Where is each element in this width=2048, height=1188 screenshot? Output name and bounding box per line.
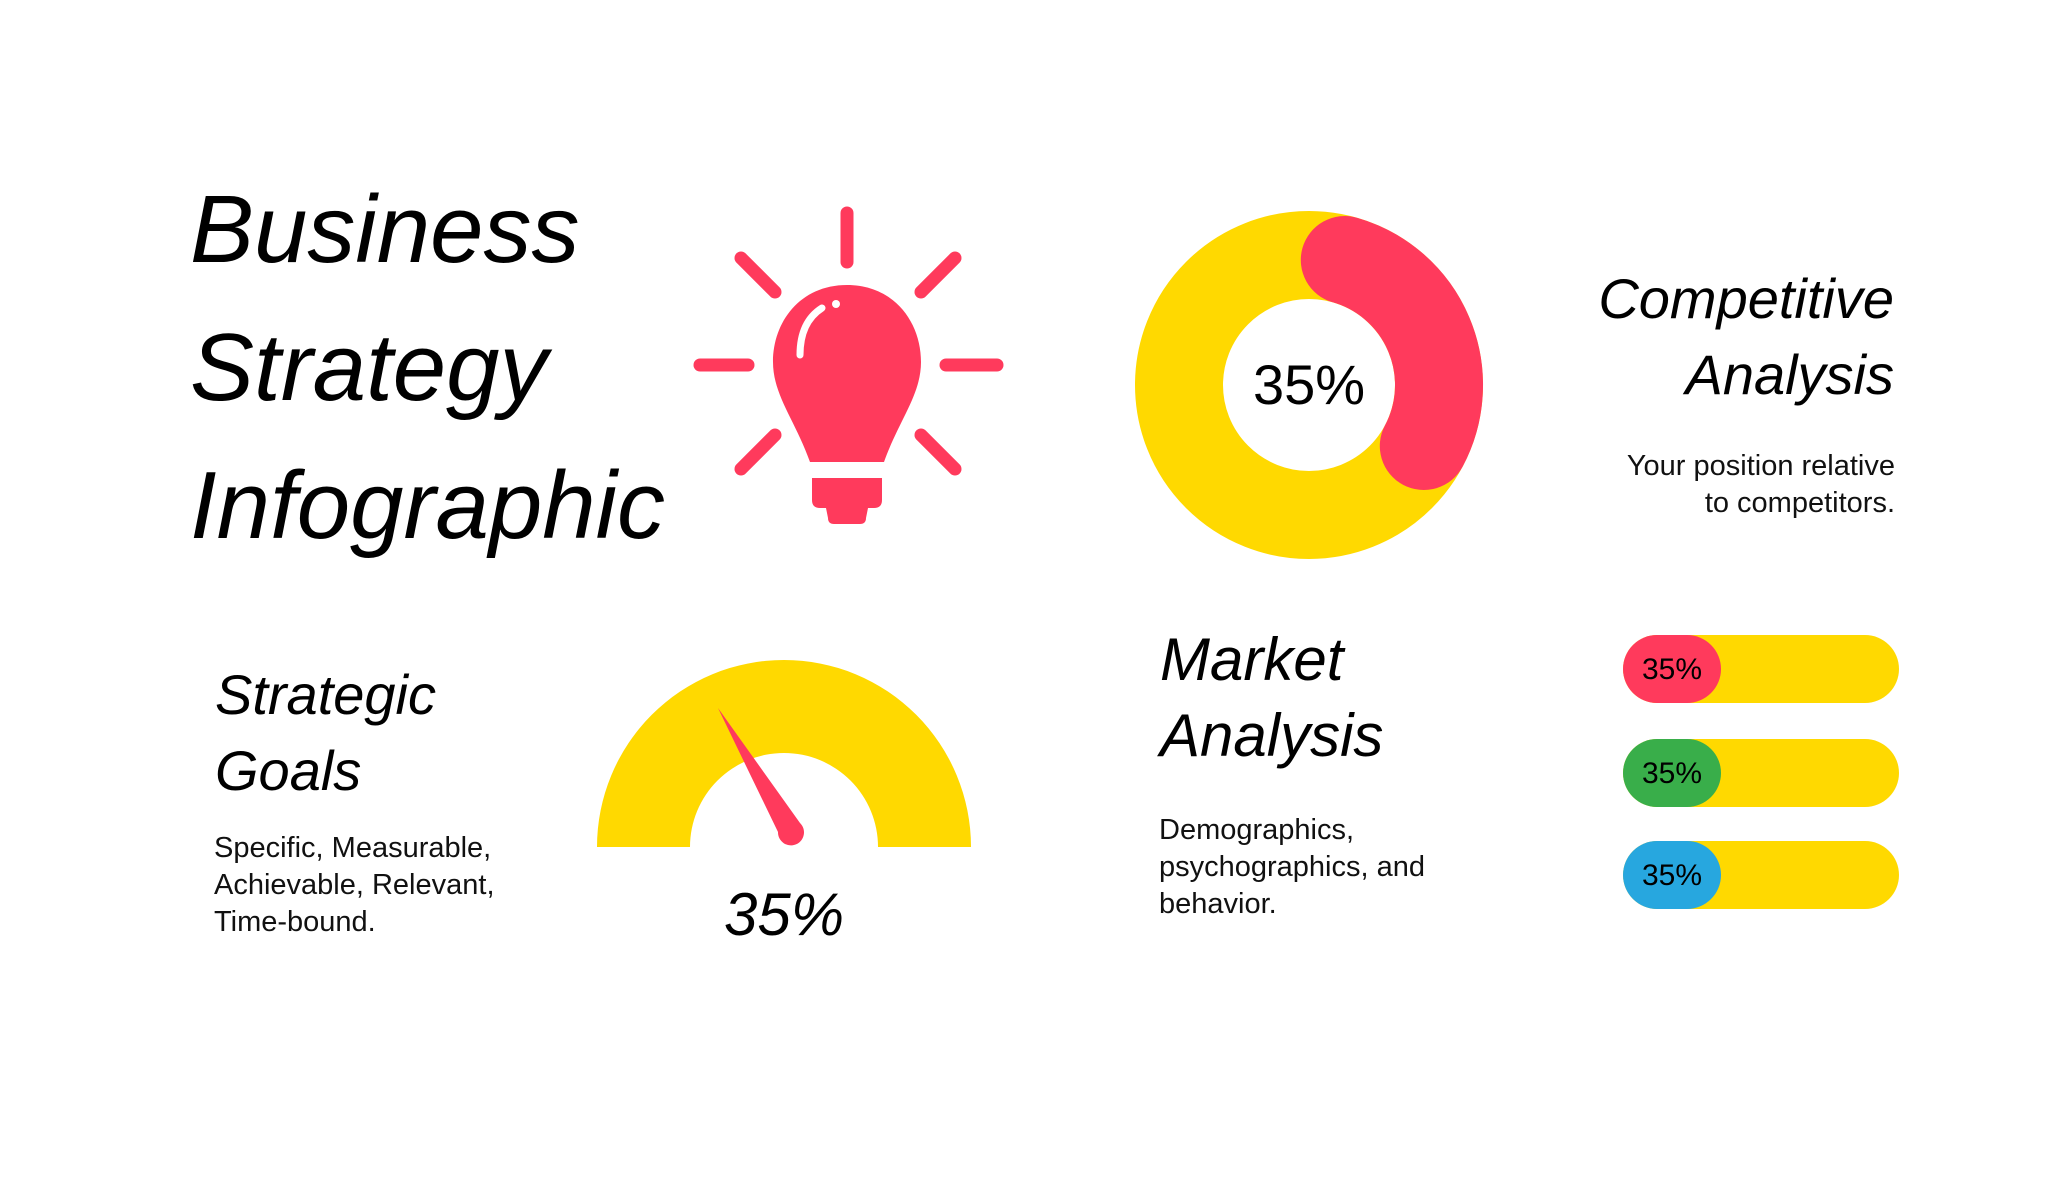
title: Strategy <box>190 314 553 421</box>
heading: market analysis <box>1157 626 1383 769</box>
donut chart <box>1179 255 1439 515</box>
text: strategic description <box>214 832 494 938</box>
text: competitive description: to competitors. <box>1705 487 1895 519</box>
heading: market analysis: Analysis <box>1157 702 1383 769</box>
text: competitive description <box>1627 450 1895 519</box>
title: Infographic <box>190 452 665 559</box>
bar: green: 35% <box>1642 757 1702 790</box>
text: competitive description: Your position relative <box>1627 450 1895 482</box>
text: market description: psychographics, and <box>1159 851 1425 883</box>
text: strategic description: Achievable, Relevant, <box>214 869 494 901</box>
heading: strategic goals: Goals <box>215 739 361 802</box>
heading: strategic goals: Strategic <box>215 663 436 726</box>
heading: competitive analysis: Competitive <box>1598 267 1894 330</box>
bar: red: 35% <box>1642 653 1702 686</box>
title <box>190 176 665 559</box>
bar: green <box>1623 739 1899 807</box>
text: strategic description: Specific, Measurable, <box>214 832 491 864</box>
bar: red <box>1623 635 1899 703</box>
bar: blue: 35% <box>1642 859 1702 892</box>
gauge chart <box>597 660 971 948</box>
gauge chart: 35% <box>724 881 844 948</box>
heading: strategic goals <box>215 663 436 802</box>
text: market description: behavior. <box>1159 888 1277 920</box>
text: market description: Demographics, <box>1159 814 1354 846</box>
icon: lightbulb <box>700 213 997 524</box>
title: Business <box>190 176 580 283</box>
heading: market analysis: Market <box>1160 626 1346 693</box>
donut chart: 35% <box>1253 353 1365 416</box>
text: strategic description: Time-bound. <box>214 906 376 938</box>
heading: competitive analysis <box>1598 267 1894 406</box>
bar: blue <box>1623 841 1899 909</box>
heading: competitive analysis: Analysis <box>1682 343 1894 406</box>
text: market description <box>1159 814 1425 920</box>
